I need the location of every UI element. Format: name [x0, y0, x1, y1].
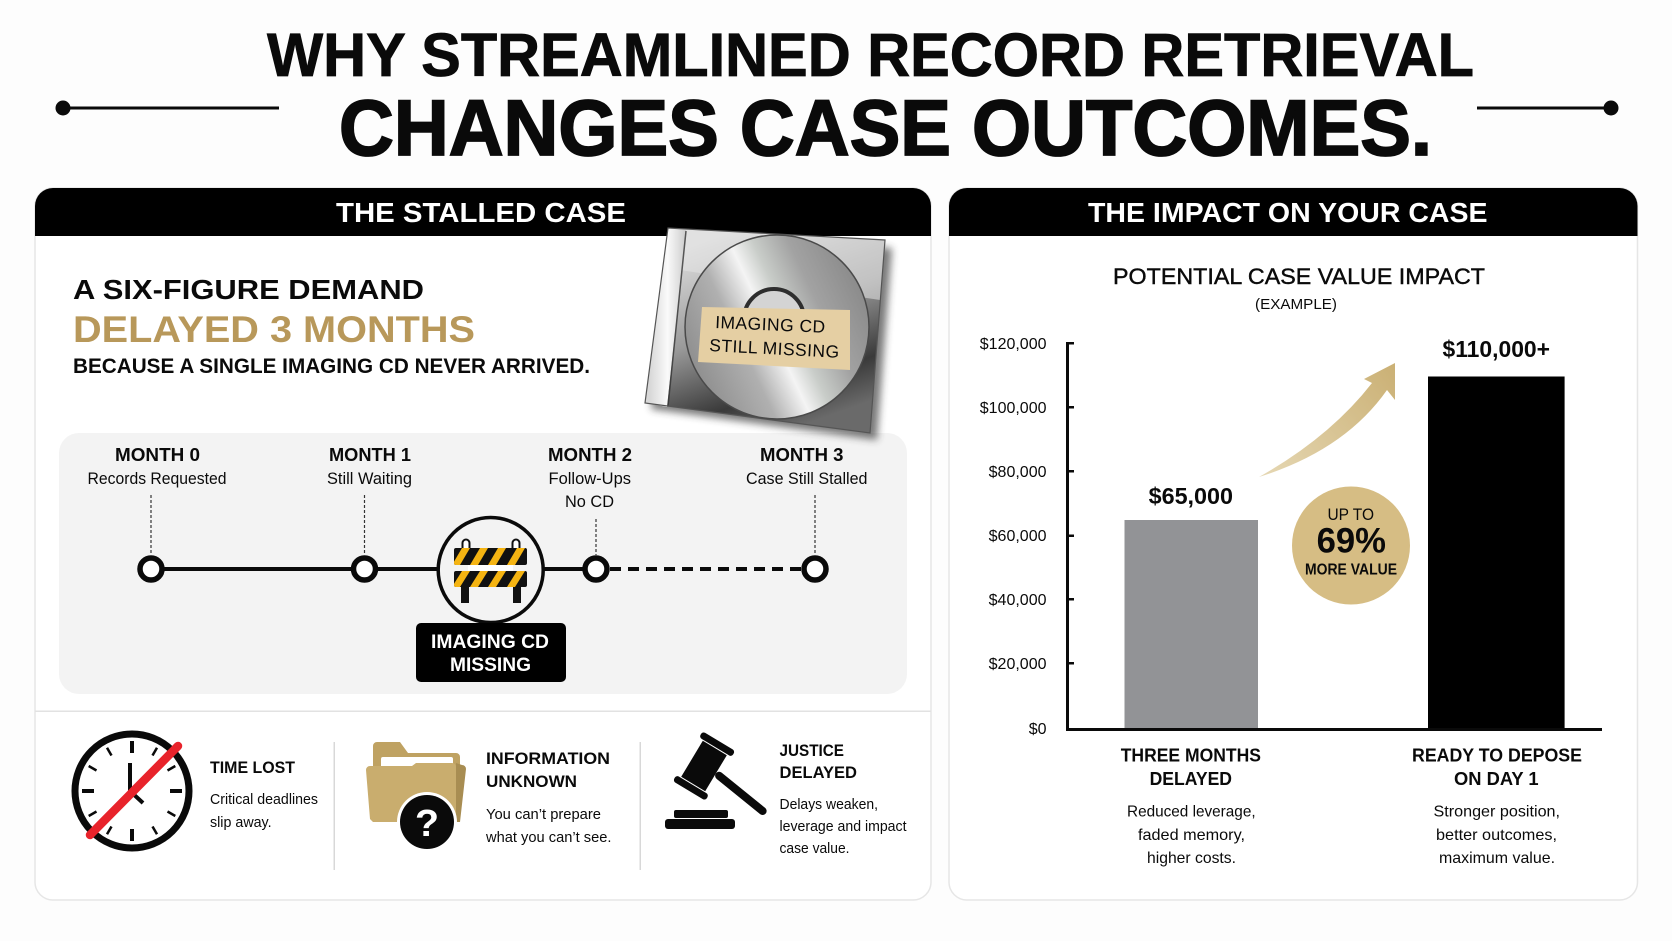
milestone: month 3: Case Still Stalled: [746, 469, 868, 488]
title: [267, 21, 1474, 172]
milestone: month 2: Follow-Ups: [548, 469, 631, 488]
item: justice delayed: JUSTICE: [780, 741, 844, 760]
icon: folder with question mark: ?: [415, 803, 439, 845]
caption: three months delayed: faded memory,: [1138, 827, 1245, 844]
milestone: month 1: MONTH 1: [329, 445, 411, 465]
bar: ready to depose on day 1: $110,000+: [1442, 336, 1550, 362]
chart heading: (EXAMPLE): [1255, 296, 1337, 313]
callout: imaging cd missing: [416, 623, 566, 682]
chart heading: POTENTIAL CASE VALUE IMPACT: [1113, 264, 1485, 289]
panel body: impact: [949, 188, 1638, 900]
item: information unknown: what you can’t see.: [485, 829, 612, 846]
caption: three months delayed: THREE MONTHS: [1121, 746, 1261, 766]
title: CHANGES CASE OUTCOMES.: [339, 83, 1432, 172]
item: time lost: Critical deadlines: [210, 791, 318, 808]
milestone: month 2: No CD: [565, 492, 614, 511]
y axis and labels: $40,000: [989, 592, 1047, 609]
milestone: month 1: Still Waiting: [327, 469, 412, 488]
caption: ready to depose: [1412, 746, 1582, 867]
bar: ready to depose on day 1: [1428, 336, 1565, 729]
item: time lost: [75, 734, 318, 848]
y axis and labels: $120,000: [980, 336, 1047, 353]
panel header: stalled case: [35, 188, 931, 236]
panel body: stalled case: [35, 188, 931, 900]
caption: three months delayed: Reduced leverage,: [1127, 804, 1256, 821]
icon: gavel: [665, 731, 786, 831]
callout: up to 69% more value: 69%: [1317, 522, 1386, 561]
panel header: impact: THE IMPACT ON YOUR CASE: [1088, 197, 1488, 228]
milestone: month 0: Records Requested: [88, 469, 226, 488]
item: justice delayed: Delays weaken,: [780, 797, 878, 813]
caption: ready to depose: better outcomes,: [1436, 827, 1557, 844]
panel: the stalled case: [35, 188, 931, 900]
item: information unknown: UNKNOWN: [486, 772, 577, 791]
icon: cd jewel case with note: [645, 228, 892, 440]
panel header: stalled case: THE STALLED CASE: [336, 197, 626, 228]
item: justice delayed: leverage and impact: [780, 819, 906, 835]
title: WHY STREAMLINED RECORD RETRIEVAL: [267, 21, 1474, 89]
headline text block: A SIX-FIGURE DEMAND: [73, 274, 424, 305]
x axis: [1066, 728, 1602, 731]
milestone: month 2: MONTH 2: [548, 445, 632, 465]
panel header: impact: [949, 188, 1638, 236]
item: information unknown: You can’t prepare: [486, 806, 601, 823]
y axis and labels: $0: [1029, 721, 1047, 738]
milestone: month 2: [548, 445, 632, 580]
y axis and labels: [980, 336, 1074, 738]
icon: clock crossed out: [75, 734, 189, 848]
milestone: month 0: MONTH 0: [115, 445, 200, 465]
item: justice delayed: case value.: [780, 841, 850, 857]
y axis and labels: $80,000: [989, 464, 1047, 481]
item: justice delayed: [665, 731, 906, 857]
milestone: month 0: [88, 445, 226, 580]
callout: imaging cd missing: MISSING: [450, 655, 531, 676]
caption: ready to depose: Stronger position,: [1434, 804, 1560, 821]
icon: road barrier: [438, 518, 543, 622]
icon: folder with question mark: [366, 742, 466, 852]
title rule: left: [56, 100, 279, 116]
bar chart: [980, 336, 1602, 867]
caption: three months delayed: [1121, 746, 1261, 867]
caption: three months delayed: higher costs.: [1147, 850, 1236, 867]
milestone: month 3: [746, 445, 868, 580]
callout: imaging cd missing: IMAGING CD: [431, 632, 549, 653]
item: information unknown: [366, 742, 612, 852]
y axis and labels: $60,000: [989, 528, 1047, 545]
item: time lost: slip away.: [210, 814, 272, 831]
y axis and labels: $100,000: [980, 400, 1047, 417]
timeline panel: [59, 433, 907, 694]
arrow: upward gold: [1259, 363, 1395, 477]
milestone: month 1: [327, 445, 412, 580]
headline text block: DELAYED 3 MONTHS: [73, 309, 475, 350]
bar: three months delayed: [1124, 483, 1258, 729]
chart heading: [1113, 264, 1485, 313]
headline text block: BECAUSE A SINGLE IMAGING CD NEVER ARRIVED.: [73, 355, 590, 378]
panel: the impact on your case: [949, 188, 1638, 900]
caption: ready to depose: maximum value.: [1439, 850, 1555, 867]
caption: ready to depose: ON DAY 1: [1454, 769, 1539, 789]
timeline line: solid and dashed: [151, 567, 802, 571]
icon: cd jewel case with note: STILL MISSING: [709, 335, 840, 362]
callout: up to 69% more value: UP TO: [1328, 505, 1374, 524]
headline text block: [73, 274, 590, 378]
section divider: [35, 710, 931, 712]
caption: ready to depose: READY TO DEPOSE: [1412, 746, 1582, 766]
callout: up to 69% more value: MORE VALUE: [1305, 562, 1397, 579]
milestone: month 3: MONTH 3: [760, 445, 844, 465]
icon: cd jewel case with note: IMAGING CD: [715, 312, 826, 337]
callout: up to 69% more value: [1292, 486, 1410, 604]
title rule: right: [1477, 100, 1618, 116]
item: time lost: TIME LOST: [210, 758, 296, 777]
caption: three months delayed: DELAYED: [1150, 769, 1232, 789]
y axis and labels: $20,000: [989, 656, 1047, 673]
item: information unknown: INFORMATION: [486, 749, 610, 768]
item: justice delayed: DELAYED: [780, 763, 857, 782]
bar: three months delayed: $65,000: [1149, 483, 1233, 509]
